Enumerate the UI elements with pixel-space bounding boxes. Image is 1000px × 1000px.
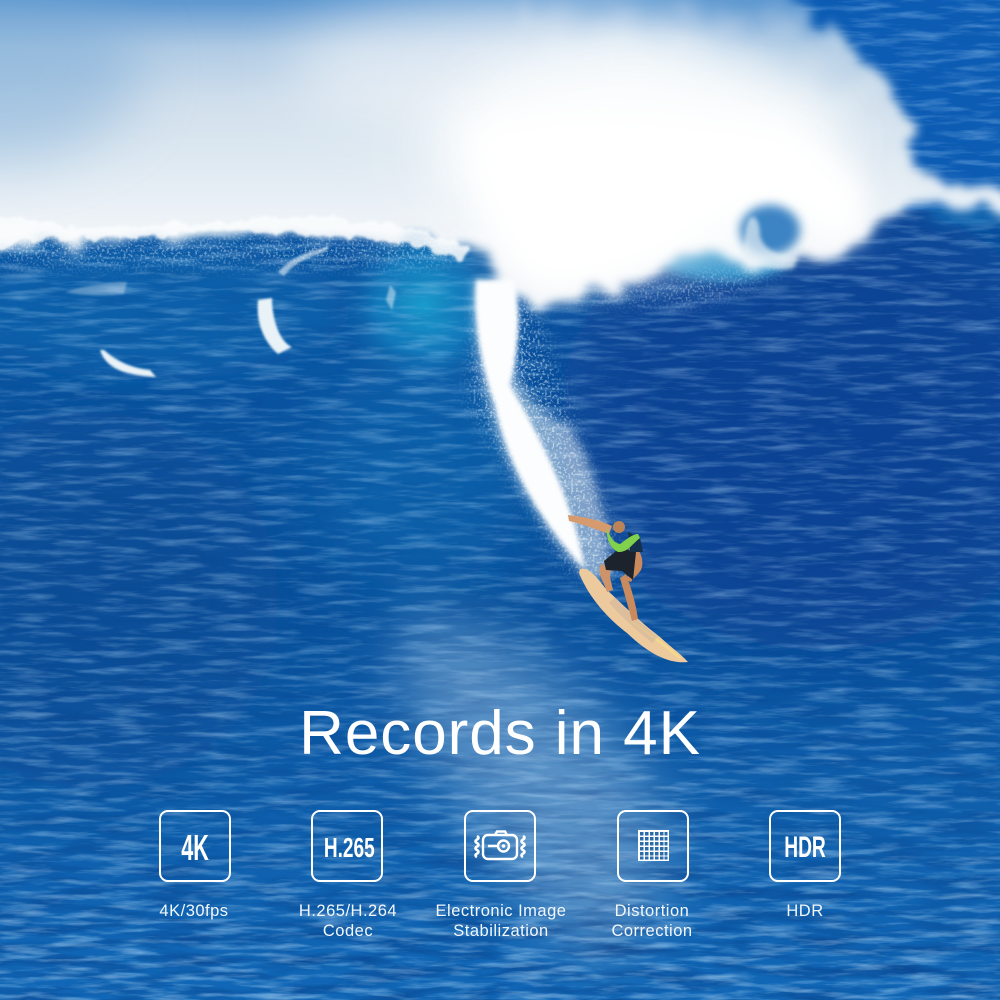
teal hollow beneath the crest <box>663 205 1000 280</box>
label: Distortion Correction: Distortion <box>615 902 689 920</box>
label: Electronic Image Stabilization: Stabilization <box>453 922 549 940</box>
label: HDR: HDR <box>786 902 824 920</box>
label: Distortion Correction: Correction <box>611 922 693 940</box>
surfboard <box>579 569 688 662</box>
open sea top right <box>680 0 1000 210</box>
title: Records in 4K <box>299 699 701 768</box>
foam line along wave lip <box>0 212 470 262</box>
icon: grid <box>638 830 669 861</box>
icon text: 4K: 4K <box>181 827 209 868</box>
wave crest spray <box>0 0 1000 308</box>
feature: 4K icon box <box>159 810 231 882</box>
label: Electronic Image Stabilization <box>436 902 566 940</box>
label: Electronic Image Stabilization: Electronic Image <box>436 902 566 920</box>
icon text: HDR: HDR <box>784 831 826 864</box>
label: H.265/H.264 Codec: H.265/H.264 <box>299 902 397 920</box>
sea base <box>0 212 1000 1000</box>
surfer <box>568 515 643 621</box>
blue hole in the crest with foam strand <box>740 205 800 269</box>
foam marks on left of wave face <box>65 246 396 377</box>
label: 4K/30fps: 4K/30fps <box>159 902 229 920</box>
icon: shaking camera <box>474 830 526 860</box>
label: H.265/H.264 Codec: Codec <box>323 922 373 940</box>
label: Distortion Correction <box>611 902 693 940</box>
falling foam and spray to surfer <box>472 280 612 582</box>
feature: HDR icon box <box>769 810 841 882</box>
feature: stabilization icon box <box>464 810 536 882</box>
spray speckle <box>0 240 800 580</box>
icon text: H.265: H.265 <box>324 832 375 863</box>
feature: distortion correction icon box <box>617 810 689 882</box>
feature: H.265 icon box <box>311 810 383 882</box>
label: H.265/H.264 Codec <box>299 902 397 940</box>
